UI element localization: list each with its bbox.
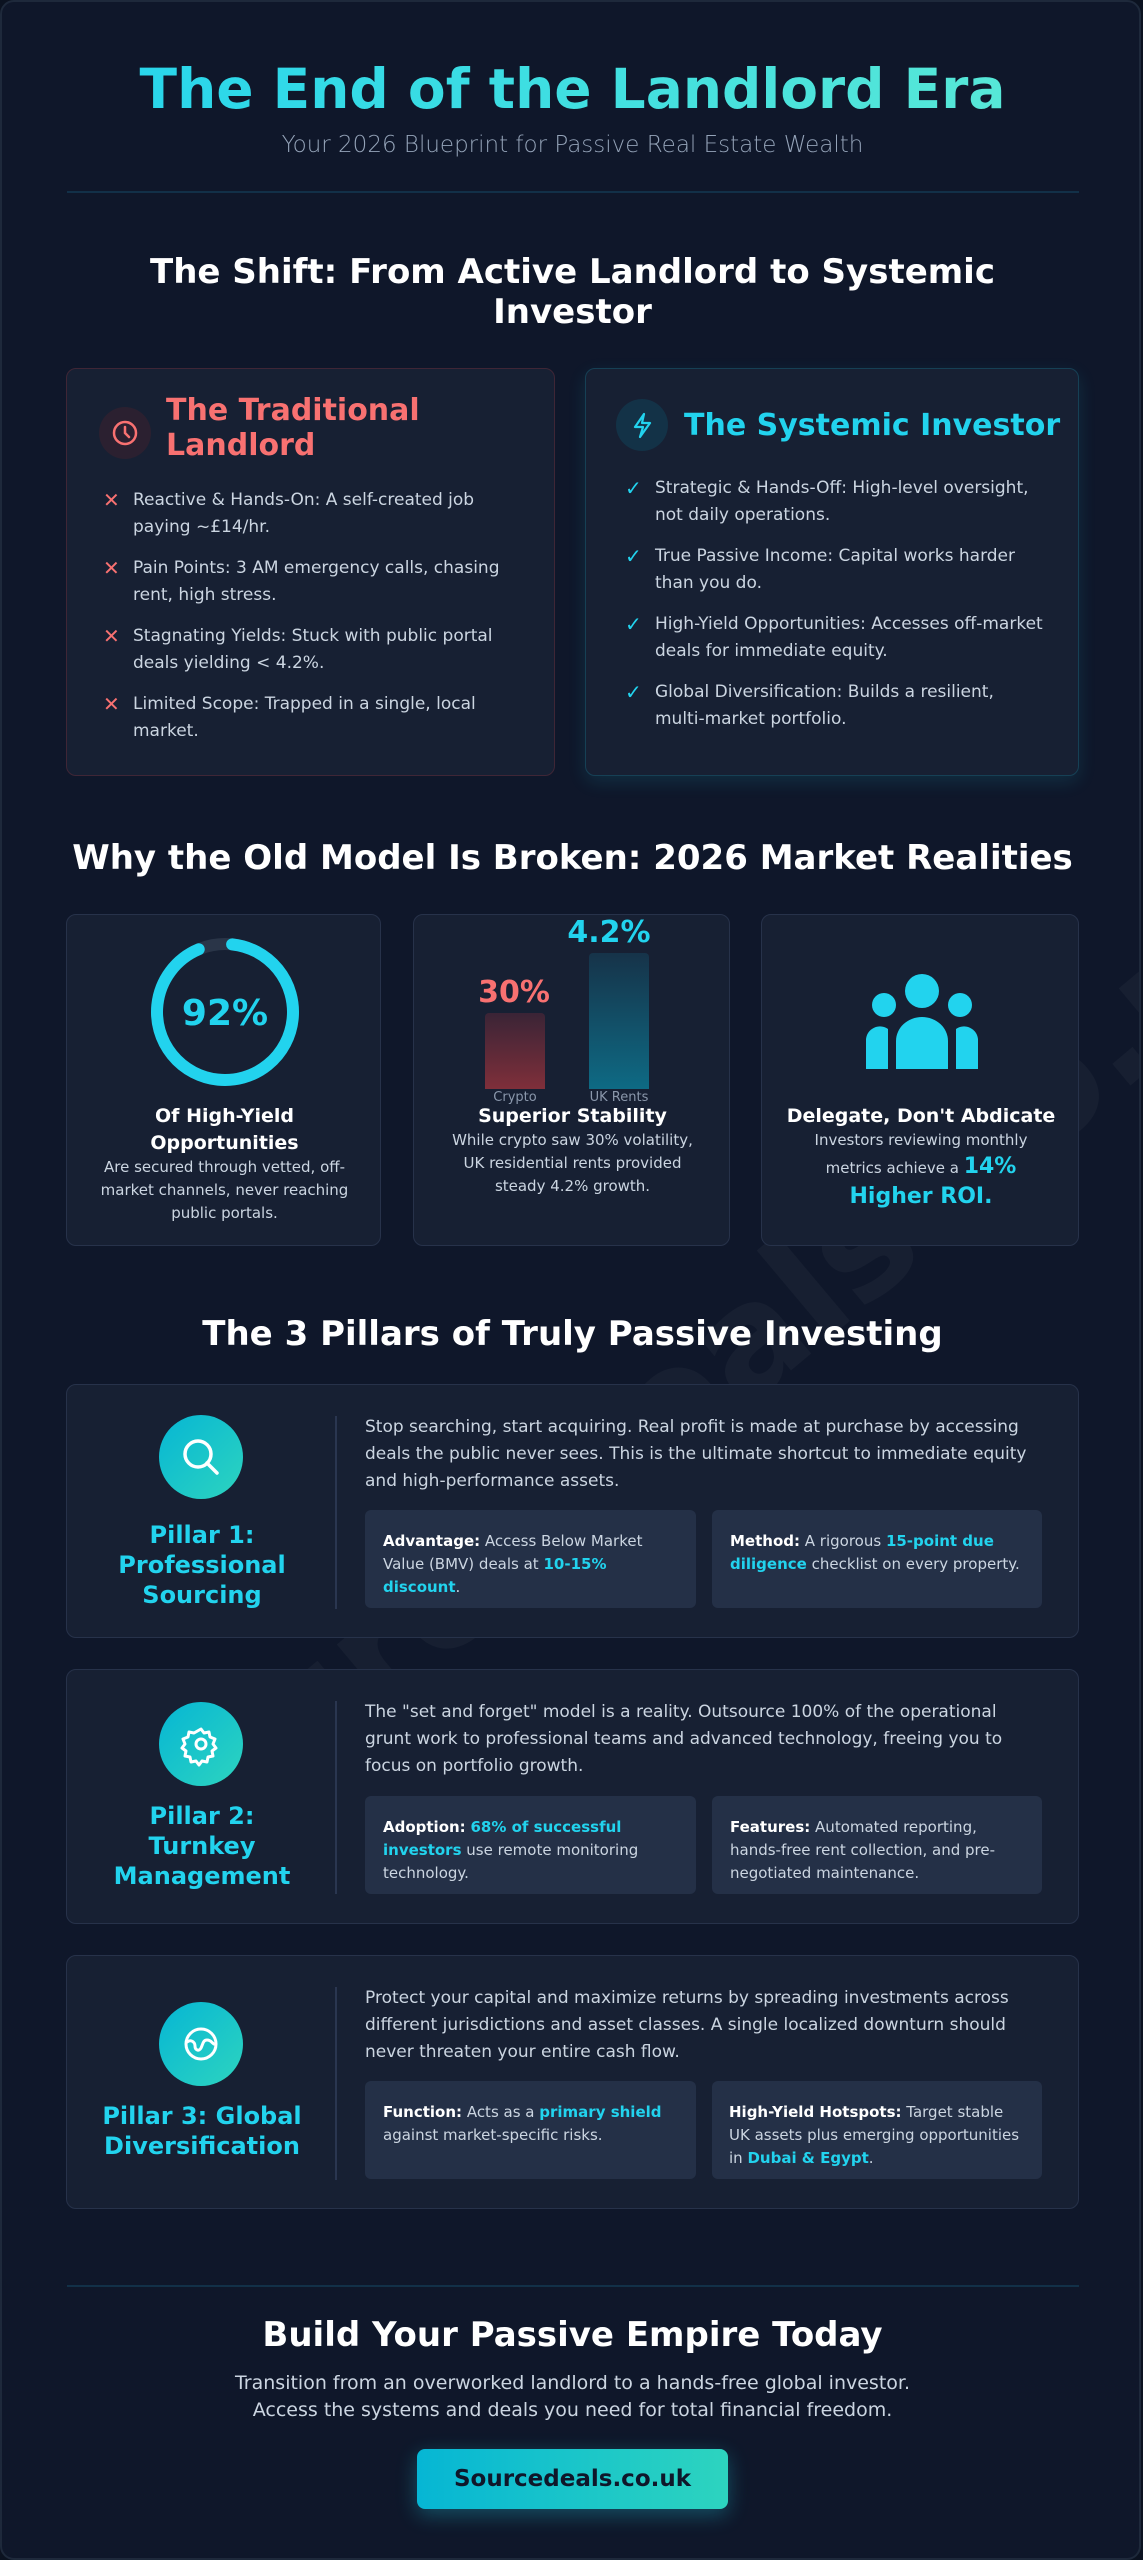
list: Strategic & Hands-Off: High-level oversight, bbox=[655, 478, 1029, 498]
list: ✓ bbox=[625, 544, 642, 568]
label: Delegate, Don't Abdicate bbox=[787, 1105, 1055, 1127]
text: The "set and forget" model is a reality. Outsource 100% of the operational grunt work to professional teams and advanced technology, freeing you to focus on portfolio growth. bbox=[365, 1702, 1002, 1776]
list: Global Diversification: Builds a resilient, bbox=[655, 682, 994, 702]
list: than you do. bbox=[655, 573, 762, 593]
list: paying ~£14/hr. bbox=[133, 517, 270, 537]
box: advantage bbox=[365, 1510, 696, 1608]
box: adoption bbox=[365, 1796, 696, 1894]
ring chart: 92% bbox=[182, 993, 268, 1034]
bar chart: Crypto bbox=[493, 1090, 537, 1105]
box: hotspots bbox=[712, 2081, 1042, 2179]
box: features bbox=[712, 1796, 1042, 1894]
heading: why broken: Why the Old Model Is Broken: 2026 Market Realities bbox=[72, 838, 1073, 878]
label: Superior Stability bbox=[478, 1105, 667, 1127]
pillar title: Pillar 3: Global bbox=[102, 2102, 302, 2130]
list: deals yielding < 4.2%. bbox=[133, 653, 324, 673]
subtitle: Your 2026 Blueprint for Passive Real Estate Wealth bbox=[282, 132, 863, 158]
icon: people bbox=[866, 974, 978, 1069]
icon: globe bbox=[159, 2002, 243, 2086]
list: deals for immediate equity. bbox=[655, 641, 888, 661]
label bbox=[150, 1105, 299, 1154]
heading: the shift: The Shift: From Active Landlord to Systemic Investor bbox=[150, 252, 995, 332]
box: adoption: Adoption: 68% of successful investors use remote monitoring technology. bbox=[383, 1818, 638, 1882]
text: While crypto saw 30% volatility, UK residential rents provided steady 4.2% growth. bbox=[452, 1131, 693, 1195]
pillar 1 bbox=[66, 1384, 1079, 1638]
text: Are secured through vetted, off-market channels, never reaching public portals. bbox=[101, 1158, 348, 1222]
list: High-Yield Opportunities: Accesses off-market bbox=[655, 614, 1043, 634]
bar chart: 4.2% bbox=[567, 915, 651, 950]
pillar title: Turnkey bbox=[148, 1832, 255, 1860]
cta text bbox=[234, 2372, 910, 2421]
text: Stop searching, start acquiring. Real profit is made at purchase by accessing deals the public never sees. This is the ultimate shortcut to immediate equity and high-performance assets. bbox=[365, 1417, 1026, 1491]
heading: Landlord bbox=[166, 428, 315, 463]
list: rent, high stress. bbox=[133, 585, 277, 605]
list: ✕ bbox=[103, 556, 120, 580]
pillar title: Professional bbox=[118, 1551, 286, 1579]
cta text: Access the systems and deals you need for total financial freedom. bbox=[253, 2399, 892, 2421]
icon: bolt bbox=[616, 399, 668, 451]
box: function bbox=[365, 2081, 696, 2179]
pillar title: Pillar 2: bbox=[150, 1802, 254, 1830]
list: ✓ bbox=[625, 612, 642, 636]
bar chart: 30% bbox=[478, 975, 550, 1010]
list: ✕ bbox=[103, 488, 120, 512]
text: Investors reviewing monthly metrics achieve a 14% Higher ROI. bbox=[815, 1131, 1027, 1209]
box: hotspots: High-Yield Hotspots: Target stable UK assets plus emerging opportunities in Dubai & Egypt. bbox=[729, 2103, 1019, 2167]
panel: systemic investor: multi-market portfolio. bbox=[655, 709, 846, 729]
label: Opportunities bbox=[150, 1132, 299, 1154]
button bbox=[417, 2449, 728, 2509]
box: advantage: Advantage: Access Below Market Value (BMV) deals at 10-15% discount. bbox=[383, 1532, 642, 1596]
heading bbox=[166, 393, 420, 463]
pillar title bbox=[114, 1802, 290, 1890]
list: True Passive Income: Capital works harder bbox=[655, 546, 1015, 566]
pillar title bbox=[102, 2102, 302, 2160]
icon: search bbox=[159, 1415, 243, 1499]
list: Pain Points: 3 AM emergency calls, chasing bbox=[133, 558, 500, 578]
box: method: Method: A rigorous 15-point due diligence checklist on every property. bbox=[730, 1532, 1020, 1573]
bar chart: UK Rents bbox=[590, 1090, 648, 1105]
pillar 2 bbox=[66, 1669, 1079, 1924]
button: Sourcedeals.co.uk bbox=[454, 2466, 691, 2492]
panel: systemic investor bbox=[585, 368, 1079, 776]
box: method bbox=[712, 1510, 1042, 1608]
list: not daily operations. bbox=[655, 505, 830, 525]
pillar title: Pillar 1: bbox=[150, 1521, 254, 1549]
stat card: bars bbox=[413, 914, 730, 1246]
pillar 3 bbox=[66, 1955, 1079, 2209]
list: ✕ bbox=[103, 624, 120, 648]
box: function: Function: Acts as a primary shield against market-specific risks. bbox=[383, 2103, 662, 2144]
list: Stagnating Yields: Stuck with public portal bbox=[133, 626, 493, 646]
pillar title: Diversification bbox=[104, 2132, 300, 2160]
stat card: 92% bbox=[66, 914, 381, 1246]
icon: gear bbox=[159, 1702, 243, 1786]
pillar title: Management bbox=[114, 1862, 290, 1890]
text: Protect your capital and maximize returns by spreading investments across different jurisdictions and asset classes. A single localized downturn should never threaten your entire cash flow. bbox=[365, 1988, 1009, 2062]
pillar title: Sourcing bbox=[142, 1581, 262, 1609]
panel: traditional landlord bbox=[66, 368, 555, 776]
panel: traditional landlord: market. bbox=[133, 721, 199, 741]
list: ✓ bbox=[625, 680, 642, 704]
bar chart bbox=[478, 915, 651, 1105]
list: Limited Scope: Trapped in a single, local bbox=[133, 694, 476, 714]
ring chart bbox=[151, 938, 299, 1086]
heading: The Systemic Investor bbox=[684, 408, 1060, 443]
label: Of High-Yield bbox=[155, 1105, 294, 1127]
list: ✕ bbox=[103, 692, 120, 716]
cta text: Transition from an overworked landlord to a hands-free global investor. bbox=[235, 2372, 910, 2394]
title: The End of the Landlord Era bbox=[140, 57, 1005, 121]
heading: pillars: The 3 Pillars of Truly Passive Investing bbox=[202, 1314, 943, 1354]
list bbox=[103, 488, 500, 741]
list: ✓ bbox=[625, 476, 642, 500]
stat card: delegate bbox=[761, 914, 1079, 1246]
heading: cta: Build Your Passive Empire Today bbox=[262, 2315, 883, 2355]
pillar title bbox=[118, 1521, 286, 1609]
icon: clock bbox=[99, 407, 151, 459]
list: Reactive & Hands-On: A self-created job bbox=[133, 490, 474, 510]
box: features: Features: Automated reporting, hands-free rent collection, and pre-negotiated maintenance. bbox=[730, 1818, 995, 1882]
list bbox=[625, 476, 1043, 729]
heading: The Traditional bbox=[166, 393, 420, 428]
